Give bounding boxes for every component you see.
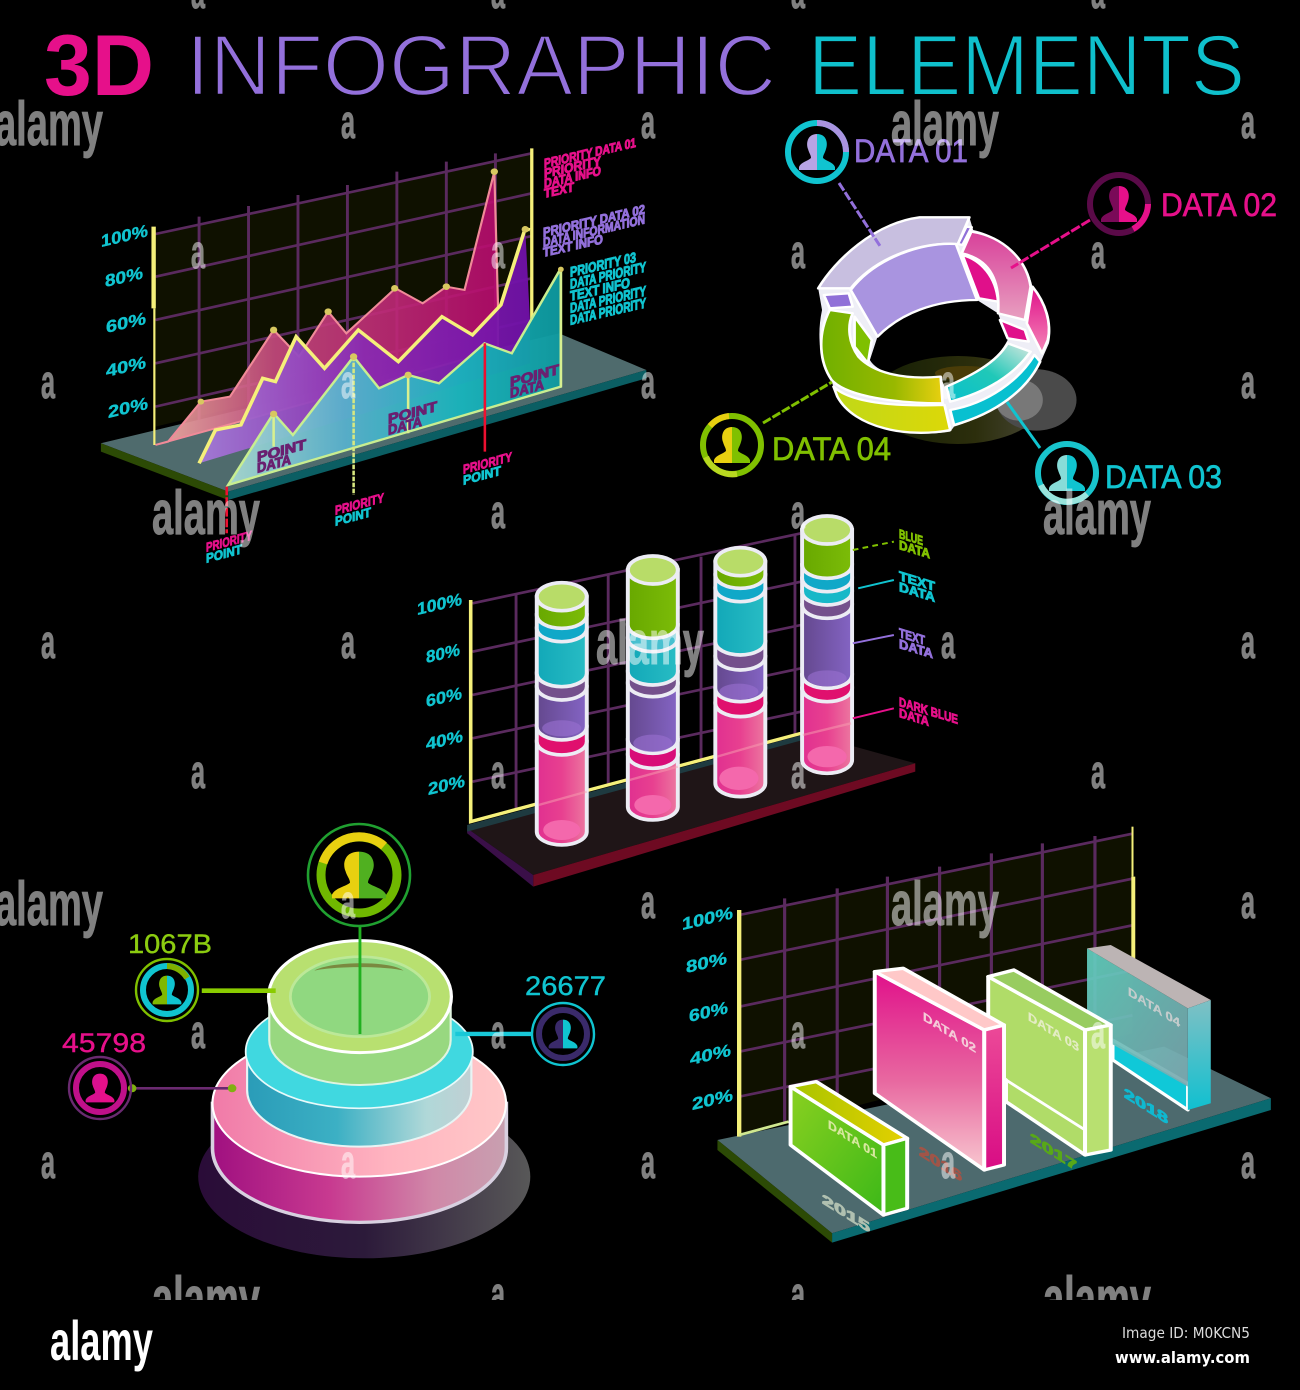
watermark pattern: a (641, 95, 655, 148)
legend text: TEXT (899, 625, 925, 648)
watermark pattern: alamy (152, 1265, 260, 1334)
watermark pattern: a (341, 95, 355, 148)
legend: pink text (544, 135, 636, 201)
bar: pink (875, 968, 1004, 1170)
watermark pattern: alamy (891, 90, 999, 159)
bar labels (828, 984, 1181, 1161)
watermark pattern: a (41, 1135, 55, 1188)
watermark pattern: a (41, 355, 55, 408)
value: 26677: 26677 (525, 971, 606, 1001)
bar labels: DATA 01 (828, 1117, 877, 1161)
axis: left and right uprights (154, 148, 532, 445)
series: purple outline (199, 228, 530, 463)
year labels: 2018 (1124, 1085, 1169, 1129)
legend text: DARK BLUE (899, 694, 958, 727)
watermark pattern: a (341, 1135, 355, 1188)
axis labels: 40% (690, 1040, 731, 1069)
peak markers (198, 168, 564, 417)
bar labels: DATA 03 (1028, 1009, 1079, 1055)
cylinder highlights: purple and teal (542, 670, 847, 752)
axis labels (417, 589, 465, 799)
watermark pattern: alamy (152, 479, 260, 548)
point labels: priority: POINT (463, 463, 501, 488)
watermark pattern: alamy (1043, 1265, 1151, 1334)
axis labels (101, 220, 148, 422)
watermark pattern: a (641, 355, 655, 408)
icon: 26677 (532, 1003, 594, 1065)
panel: stacked pyramid (62, 824, 606, 1258)
ring shadow (872, 356, 1077, 444)
year labels: 2017 (1030, 1130, 1077, 1175)
axis labels: 80% (105, 262, 143, 291)
legend text: DATA (899, 537, 930, 562)
point labels: priority: POINT (335, 505, 371, 529)
watermark pattern: a (1241, 875, 1255, 928)
axis labels: 100% (682, 902, 733, 934)
floor platform (101, 333, 646, 500)
segment: data 02 pink (962, 232, 1049, 353)
watermark pattern: a (641, 1135, 655, 1188)
legend: pink text: TEXT (544, 179, 574, 201)
watermark pattern: a (941, 615, 955, 668)
value: 1067B: 1067B (128, 929, 212, 959)
legend text: BLUE (899, 526, 923, 548)
label: data 02: DATA 02 (1161, 187, 1277, 223)
watermark pattern: a (191, 225, 205, 278)
axis: yellow uprights (739, 827, 1133, 1137)
watermark pattern: a (341, 875, 355, 928)
legend: teal text: PRIORITY 03 (570, 250, 636, 281)
legend: pink text: PRIORITY DATA 01 (544, 135, 636, 171)
panel: box chart (682, 827, 1271, 1243)
icon: data 03 (1038, 444, 1096, 502)
point labels: purple: DATA (388, 414, 422, 439)
watermark pattern: a (941, 1135, 955, 1188)
footer band (0, 1300, 1300, 1390)
legend: teal text: TEXT INFO (570, 275, 630, 305)
cylinder highlights: pink (543, 746, 847, 840)
axis labels: 60% (689, 997, 728, 1026)
point labels: purple: DATA (510, 377, 544, 402)
watermark pattern: alamy (0, 90, 103, 159)
segment: data 04 green (821, 310, 950, 433)
axis labels: 80% (426, 639, 460, 667)
series: pink area (155, 172, 498, 445)
axis labels: 40% (426, 726, 463, 754)
value: 45798: 45798 (62, 1028, 146, 1058)
bar: pale green (988, 970, 1111, 1155)
point labels: purple: POINT (388, 399, 437, 428)
point labels: priority: POINT (206, 542, 242, 566)
watermark pattern: a (1091, 745, 1105, 798)
footer image id: Image ID: M0KCN5 (1122, 1324, 1250, 1342)
watermark pattern: a (491, 485, 505, 538)
axis labels: 20% (108, 393, 148, 422)
tier: pink (212, 1030, 506, 1222)
legend text (899, 526, 958, 729)
series: teal area (228, 268, 561, 485)
axis labels: 100% (101, 220, 148, 251)
chart backdrop (155, 153, 532, 427)
legend: teal text: DATA PRIORITY (570, 284, 646, 317)
watermark pattern: a (791, 485, 805, 538)
panel: cylinder chart (417, 516, 958, 887)
bar labels: DATA 02 (923, 1009, 976, 1056)
point labels: purple: POINT (510, 362, 559, 391)
axis labels: 40% (106, 352, 146, 381)
legend leader lines (853, 542, 894, 718)
cylinder 2 (628, 556, 678, 820)
footer logo: alamy (50, 1309, 153, 1372)
watermark pattern: a (1241, 95, 1255, 148)
watermark pattern: a (641, 875, 655, 928)
icon: data 01 (788, 123, 846, 181)
legend text: DATA (899, 705, 929, 729)
watermark pattern: a (491, 225, 505, 278)
watermark pattern: a (191, 745, 205, 798)
legend: purple text: DATA INFORMATION (543, 212, 645, 250)
cylinder 3 (715, 548, 765, 797)
watermark pattern: a (791, 745, 805, 798)
ring base (818, 217, 1050, 434)
chart backdrop (739, 833, 1133, 1137)
watermark pattern: a (1241, 615, 1255, 668)
axis labels: 20% (428, 771, 465, 799)
drop lines (227, 268, 561, 533)
cylinder 4 (802, 516, 852, 773)
point labels: priority (206, 449, 512, 566)
watermark pattern: a (1091, 1005, 1105, 1058)
cylinder 1 (537, 583, 587, 845)
watermark pattern: alamy (0, 870, 103, 939)
panel: area chart (101, 135, 646, 566)
legend: pink text: DATA INFO (544, 163, 601, 191)
bar labels: DATA 04 (1128, 984, 1181, 1031)
bar: teal (1087, 945, 1211, 1110)
floor platform (717, 1047, 1271, 1243)
tier: green (269, 941, 451, 1085)
label: data 03: DATA 03 (1105, 459, 1222, 495)
watermark pattern: a (341, 355, 355, 408)
axis labels: 80% (686, 948, 727, 977)
legend: purple text: TEXT INFO (543, 231, 603, 260)
footer url: www.alamy.com (1115, 1348, 1250, 1367)
legend: pink text: PRIORITY (544, 153, 601, 181)
icon: data 04 (703, 416, 761, 474)
watermark pattern: a (41, 615, 55, 668)
leader lines (134, 927, 532, 1088)
watermark pattern: alamy (891, 870, 999, 939)
watermark pattern: a (1241, 1135, 1255, 1188)
watermark pattern: a (791, 1267, 805, 1320)
label: data 04: DATA 04 (772, 431, 891, 467)
leader lines (763, 183, 1090, 448)
icon: 1067B (136, 959, 198, 1021)
axis labels: 60% (106, 308, 146, 337)
watermark pattern: a (1091, 225, 1105, 278)
icon: 45798 (69, 1057, 131, 1119)
legend: purple text (543, 202, 645, 260)
segment: data 01 lilac (818, 217, 977, 337)
back line showing through cylinders (539, 723, 851, 805)
axis labels: 60% (426, 683, 462, 711)
panel: ring chart (703, 123, 1277, 502)
watermark pattern: a (491, 745, 505, 798)
legend text: TEXT (899, 568, 935, 594)
tier: teal (246, 995, 473, 1147)
point labels: priority: PRIORITY (463, 449, 512, 477)
watermark pattern: a (791, 1005, 805, 1058)
watermark pattern: a (941, 355, 955, 408)
axis labels: 100% (417, 589, 462, 619)
watermark pattern: a (491, 1005, 505, 1058)
watermark pattern: a (191, 1005, 205, 1058)
point labels: purple: DATA (257, 452, 291, 477)
watermark pattern: a (791, 225, 805, 278)
axis labels (682, 902, 733, 1114)
year labels: 2015 (822, 1191, 871, 1237)
title: INFOGRAPHIC (186, 18, 776, 114)
watermark pattern: alamy (1043, 479, 1151, 548)
title (44, 18, 1245, 114)
axis: yellow base (471, 600, 801, 822)
axis labels: 20% (692, 1085, 733, 1114)
legend: teal text: DATA PRIORITY (570, 260, 646, 293)
series: purple area (199, 228, 530, 463)
icon: top person (308, 824, 410, 926)
legend text: DATA (899, 636, 933, 661)
segment: data 03 teal (946, 343, 1040, 425)
legend: purple text: PRIORITY DATA 02 (543, 202, 645, 240)
icon: data 02 (1090, 175, 1148, 233)
bar: green (791, 1082, 907, 1215)
leader dots (128, 1084, 236, 1092)
legend: teal text: DATA PRIORITY (570, 296, 646, 329)
point labels: priority: PRIORITY (206, 528, 252, 555)
point labels: purple (257, 362, 559, 477)
point labels: purple: POINT (257, 437, 306, 466)
pyramid shadow (198, 1095, 530, 1258)
title: ELEMENTS (808, 18, 1245, 114)
title: 3D (44, 18, 154, 114)
legend: teal text (570, 250, 646, 329)
watermark pattern: a (1241, 355, 1255, 408)
watermark pattern: a (341, 615, 355, 668)
point labels: priority: PRIORITY (335, 490, 384, 518)
floor platform (467, 733, 915, 887)
label: data 01: DATA 01 (854, 133, 968, 169)
watermark pattern: a (491, 1267, 505, 1320)
watermark pattern: alamy (596, 609, 704, 678)
legend text: DATA (899, 579, 935, 605)
year labels (822, 1085, 1169, 1237)
year labels: 2016 (919, 1143, 962, 1186)
